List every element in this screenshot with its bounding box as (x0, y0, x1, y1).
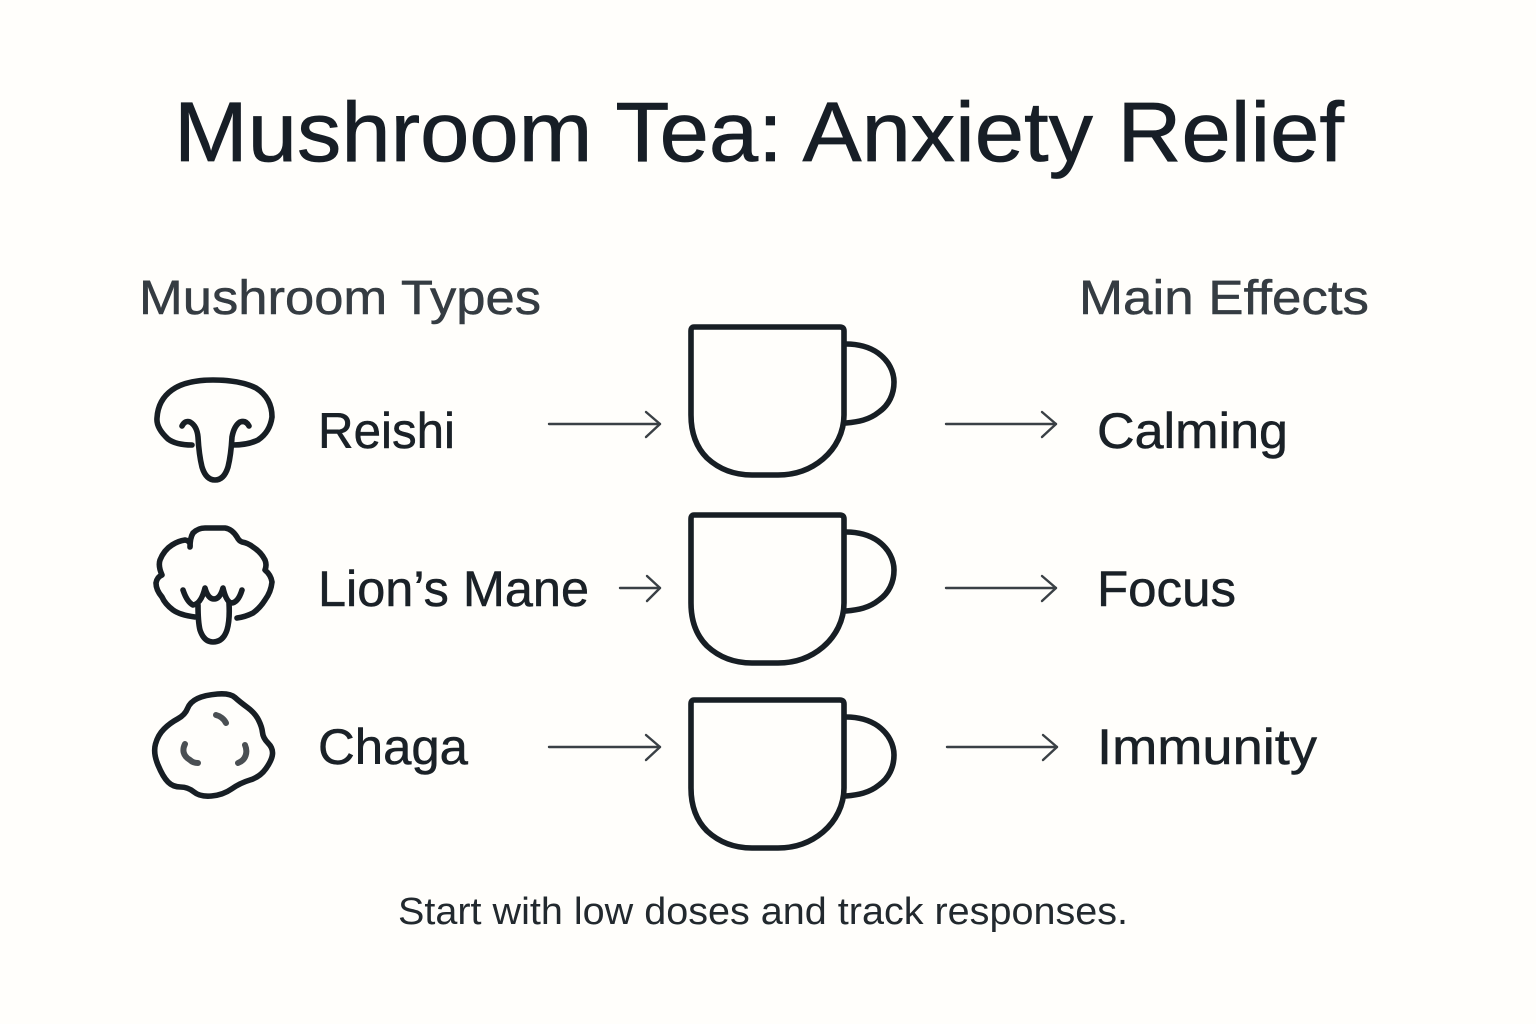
arrow: Reishi to tea (549, 412, 660, 437)
label: Calming: Calming (1097, 403, 1288, 459)
title: Mushroom Tea: Anxiety Relief (174, 85, 1345, 179)
label: Focus: Focus (1097, 561, 1236, 617)
arrow: tea to Immunity (947, 735, 1057, 760)
icon: chaga mushroom (155, 694, 273, 796)
icon: lion's mane mushroom (156, 528, 272, 642)
arrow: tea to Focus (946, 576, 1056, 601)
arrow: tea to Calming (946, 412, 1056, 437)
heading: main effects: Main Effects (1079, 272, 1369, 325)
icon: reishi mushroom (157, 380, 272, 480)
arrow: Chaga to tea (549, 735, 660, 760)
row: Lion's Mane (156, 515, 1236, 663)
icon: tea cup (691, 515, 894, 663)
arrow: Lion's Mane to tea (620, 576, 660, 601)
row: Chaga (155, 694, 1317, 848)
icon: tea cup (691, 700, 894, 848)
footer note: Start with low doses and track responses. (398, 891, 1128, 933)
row: Reishi (157, 327, 1288, 480)
label: Lion's Mane: Lion’s Mane (318, 561, 589, 617)
heading: mushroom types: Mushroom Types (139, 272, 541, 325)
chaga surface marks (183, 715, 246, 763)
label: Immunity: Immunity (1097, 719, 1317, 775)
label: Chaga: Chaga (318, 719, 468, 775)
icon: tea cup (691, 327, 894, 475)
label: Reishi: Reishi (318, 403, 455, 459)
